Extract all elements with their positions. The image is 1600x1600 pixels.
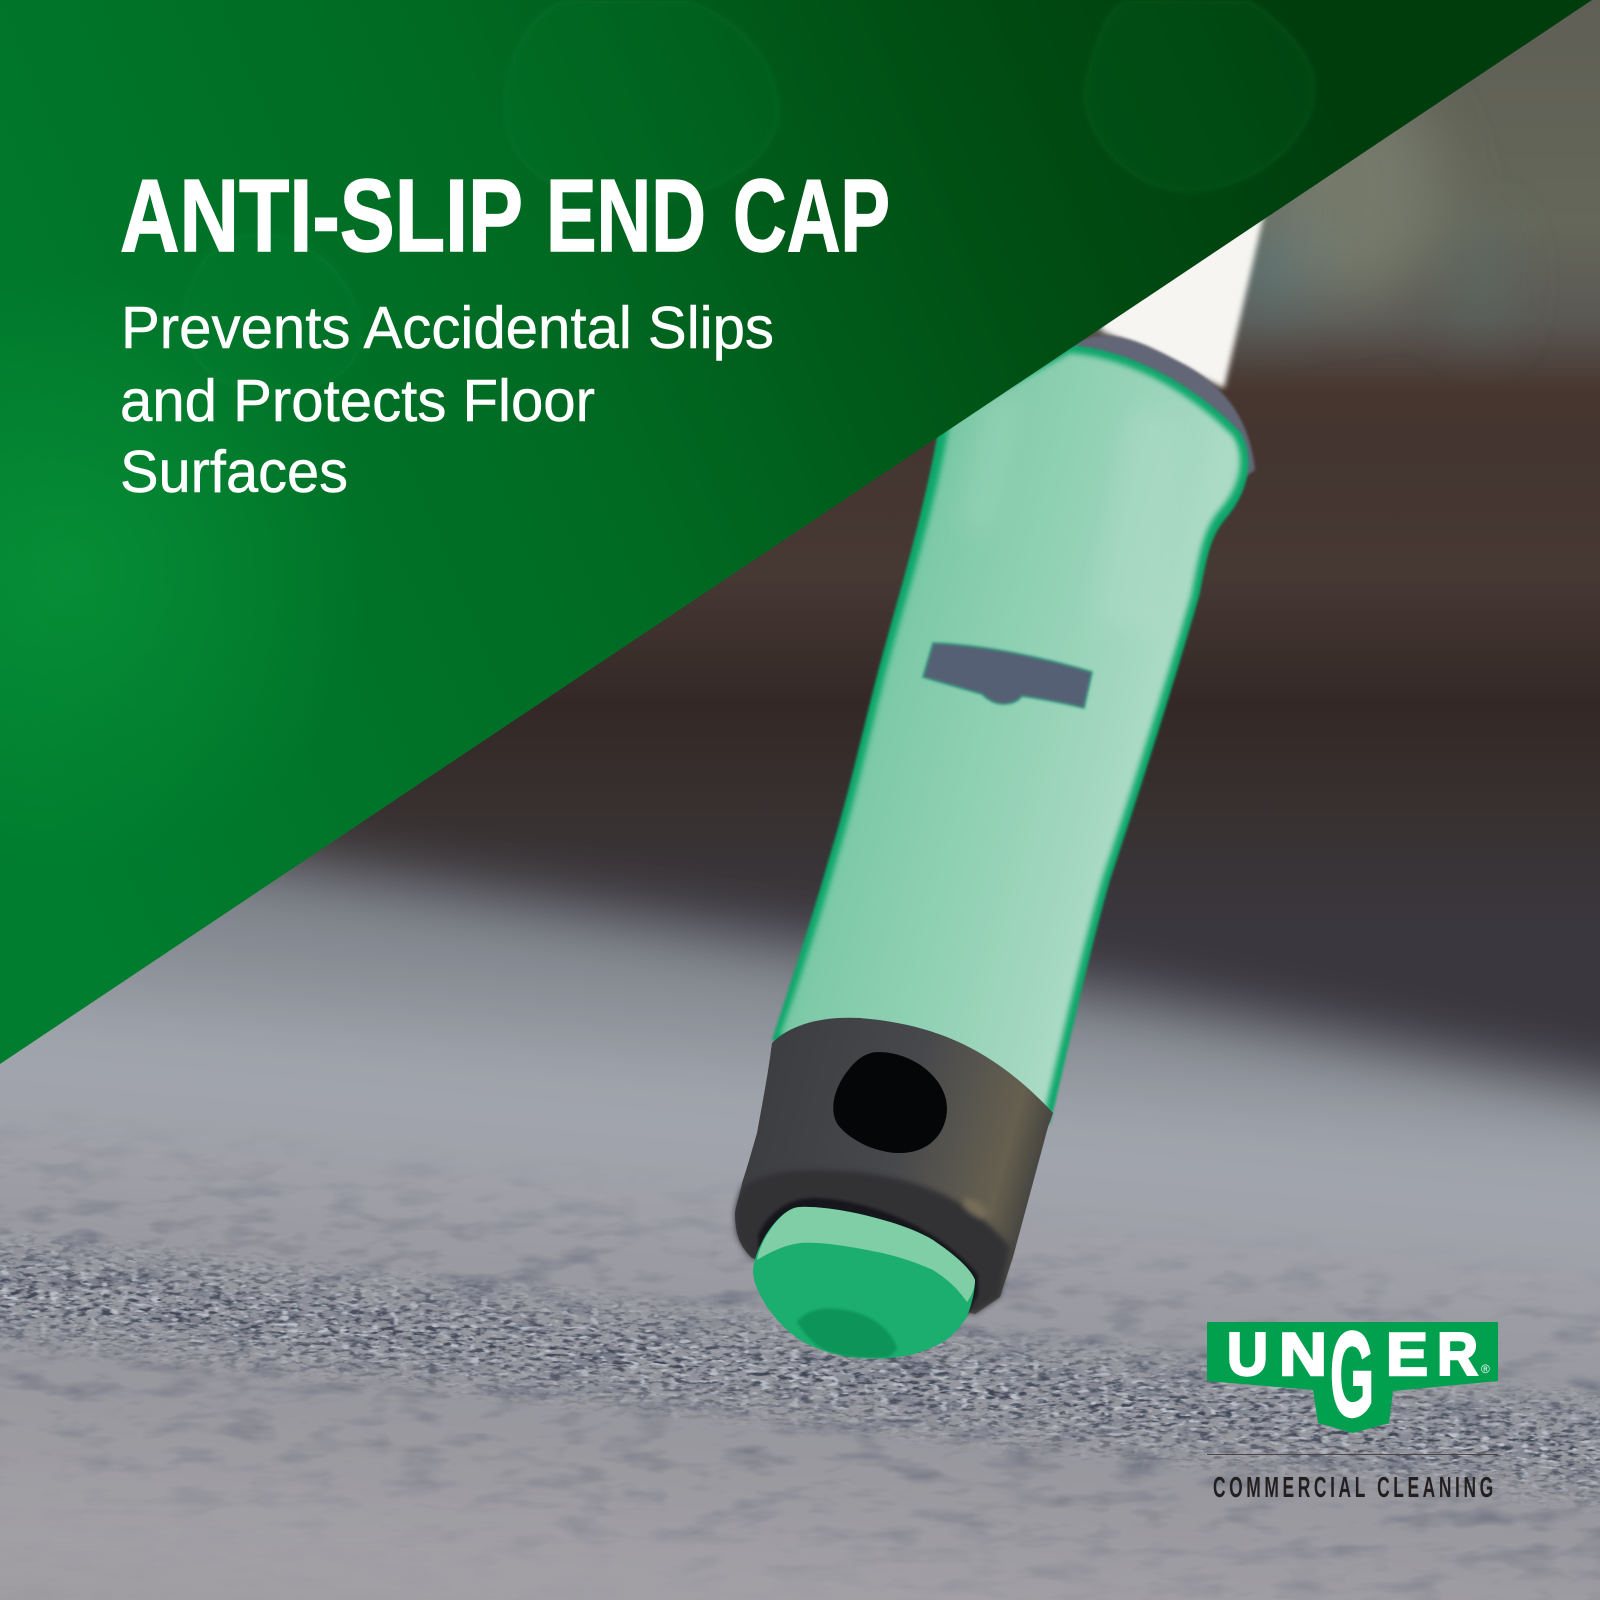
blurred building, upper right (1230, 80, 1496, 340)
blurred floor (0, 815, 1600, 1600)
green grip (772, 345, 1248, 1124)
rim highlight (960, 1194, 990, 1222)
title: ANTI-SLIP (120, 158, 523, 273)
subtitle: Prevents Accidental Slips (121, 295, 774, 361)
subtitle (120, 295, 774, 505)
bright glow, left (0, 387, 262, 740)
foot upper crown (757, 1207, 975, 1302)
logo badge (1207, 1322, 1498, 1433)
faint bokeh shapes (1086, 1, 1314, 190)
logo wordmark: E (1386, 1321, 1428, 1388)
black rubber band (735, 1018, 1053, 1314)
foot seat shadow (758, 1198, 978, 1316)
in-focus gravel texture (0, 1229, 1600, 1512)
subtitle: Surfaces (120, 439, 348, 505)
product: squeegee handle with end cap (735, 180, 1272, 1358)
Unger logo (1207, 1307, 1498, 1443)
grip highlights (1095, 410, 1185, 640)
title (120, 158, 890, 273)
logo wordmark: N (1279, 1321, 1327, 1388)
logo wordmark (1227, 1307, 1478, 1443)
embossed emblem (923, 643, 1092, 708)
hole (833, 1052, 947, 1153)
logo wordmark: R (1437, 1321, 1478, 1388)
subtitle: and Protects Floor (120, 368, 595, 434)
blurred floor base (0, 1300, 1600, 1600)
out-of-focus floor blotches (0, 1154, 1600, 1600)
title: END (546, 158, 706, 273)
logo tagline: COMMERCIAL CLEANING (1213, 1472, 1493, 1504)
grey collar (1065, 336, 1255, 480)
green anti-slip foot (753, 1207, 975, 1358)
logo divider (1207, 1454, 1498, 1455)
Unger logo: ® (1481, 1362, 1490, 1376)
foot contact pad (797, 1308, 897, 1358)
logo wordmark: U (1227, 1321, 1268, 1388)
title: CAP (733, 158, 890, 273)
logo wordmark: G (1330, 1307, 1374, 1443)
white pole (1100, 180, 1272, 388)
rubber band rim (735, 1170, 1010, 1314)
green diagonal panel (0, 0, 1592, 1064)
